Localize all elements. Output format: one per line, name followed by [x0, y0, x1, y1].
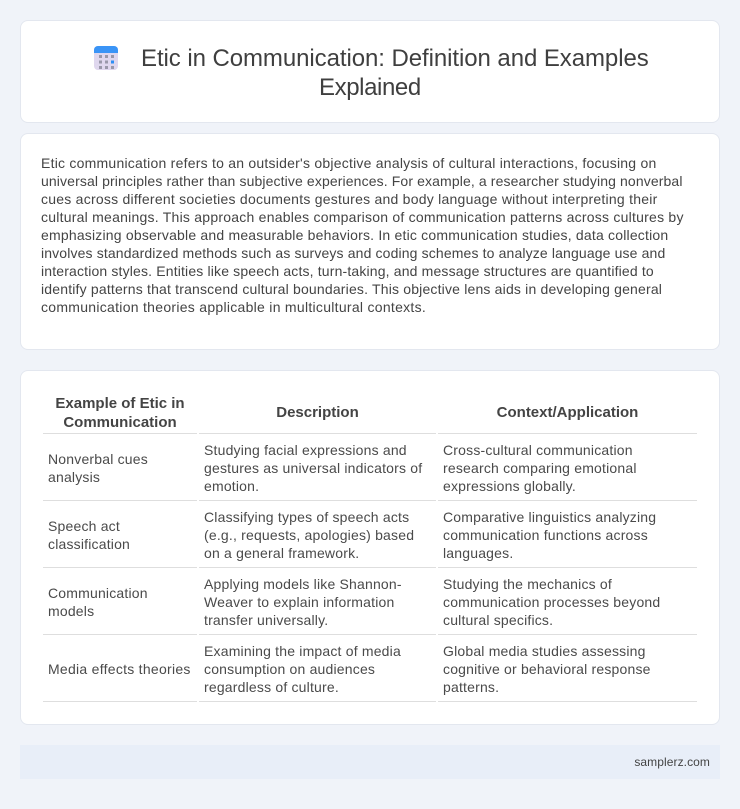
row 1 context: research comparing emotional [443, 460, 637, 476]
row 1 label [48, 451, 148, 485]
row 2 label [48, 518, 130, 552]
row 3 context: Studying the mechanics of [443, 576, 612, 592]
row 1 label: Nonverbal cues [48, 451, 148, 467]
row 2 description: Classifying types of speech acts [204, 509, 409, 525]
row 3 label: Communication [48, 585, 148, 601]
panel: definition [20, 133, 720, 350]
row 1 description: gestures as universal indicators of [204, 460, 422, 476]
row 3 description [204, 576, 402, 628]
definition text: cues across different societies documents gestures and body language without interpreting their [41, 191, 658, 207]
row 4 context: Global media studies assessing [443, 643, 646, 659]
row 4 label: Media effects theories [48, 661, 191, 677]
row 3 label [48, 585, 148, 619]
row 2 label: Speech act [48, 518, 120, 534]
table header: example [55, 395, 185, 431]
row 4 context: cognitive or behavioral response [443, 661, 651, 677]
row 3 context [443, 576, 660, 628]
row 4 context [443, 643, 651, 695]
row 3 context: communication processes beyond [443, 594, 660, 610]
row 2 context: Comparative linguistics analyzing [443, 509, 656, 525]
row 4 description [204, 643, 401, 695]
row 2 description [204, 509, 414, 561]
footer bar [20, 745, 720, 779]
row 2 description: on a general framework. [204, 545, 359, 561]
row 1 context: Cross-cultural communication [443, 442, 633, 458]
panel: examples table [20, 370, 720, 725]
row 1 label: analysis [48, 469, 100, 485]
row 4 description: Examining the impact of media [204, 643, 401, 659]
definition text: universal principles rather than subjective experiences. For example, a researcher studying nonverbal [41, 173, 683, 189]
row 4 description: consumption on audiences [204, 661, 375, 677]
icon: calendar [94, 46, 118, 70]
table header: description: Description [276, 404, 359, 421]
definition text: cultural meanings. This approach enables comparison of communication patterns across cultures by [41, 209, 684, 225]
definition text: identify patterns that transcend cultural boundaries. This objective lens aids in developing general [41, 281, 662, 297]
definition text: Etic communication refers to an outsider's objective analysis of cultural interactions, focusing on [41, 155, 656, 171]
definition text: involves standardized methods such as surveys and coding schemes to analyze language use and [41, 245, 665, 261]
table header: context: Context/Application [497, 404, 638, 421]
panel: header [20, 20, 720, 123]
row 3 description: Applying models like Shannon- [204, 576, 402, 592]
row 3 context: cultural specifics. [443, 612, 553, 628]
title [141, 45, 649, 101]
table header: example: Communication [63, 414, 177, 431]
row 3 description: Weaver to explain information [204, 594, 394, 610]
row 2 description: (e.g., requests, apologies) based [204, 527, 414, 543]
row 4 context: patterns. [443, 679, 499, 695]
table header: example: Example of Etic in [55, 395, 185, 412]
title: Explained [319, 74, 421, 101]
definition text [41, 155, 684, 315]
definition text: communication theories applicable in multicultural contexts. [41, 299, 426, 315]
row 1 description [204, 442, 422, 494]
row 3 description: transfer universally. [204, 612, 328, 628]
row 2 context: languages. [443, 545, 513, 561]
row 2 context: communication functions across [443, 527, 648, 543]
row 1 context: expressions globally. [443, 478, 576, 494]
footer credit: samplerz.com [634, 755, 710, 769]
definition text: emphasizing observable and measurable behaviors. In etic communication studies, data collection [41, 227, 668, 243]
row 2 label: classification [48, 536, 130, 552]
row 4 description: regardless of culture. [204, 679, 339, 695]
row 2 context [443, 509, 656, 561]
row 1 context [443, 442, 637, 494]
definition text: interaction styles. Entities like speech acts, turn-taking, and message structures are quantified to [41, 263, 654, 279]
row 3 label: models [48, 603, 94, 619]
row 1 description: Studying facial expressions and [204, 442, 407, 458]
title: Etic in Communication: Definition and Examples [141, 45, 649, 72]
row 1 description: emotion. [204, 478, 259, 494]
